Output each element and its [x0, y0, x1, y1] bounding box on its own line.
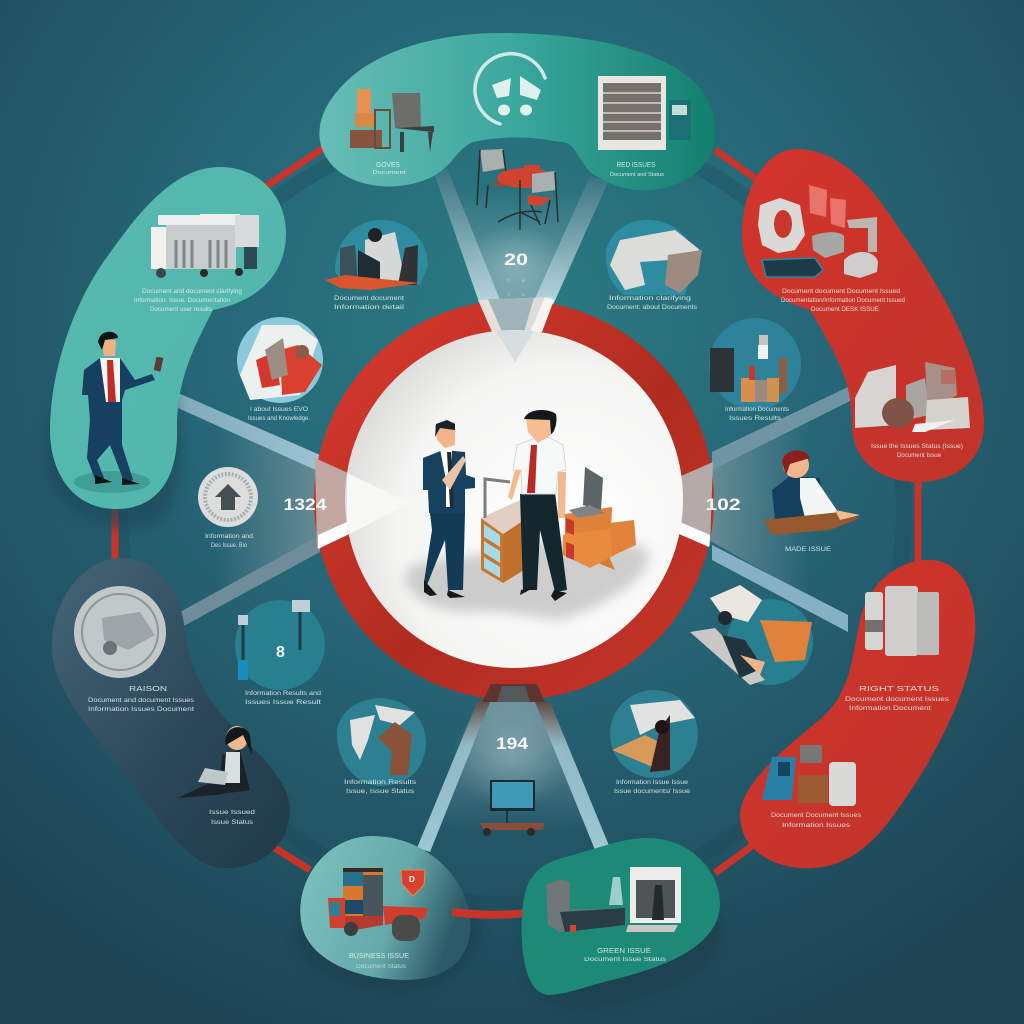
figure: man with phone: [74, 332, 163, 493]
text: Information Results and: [245, 690, 321, 697]
icon: appliances: [758, 185, 878, 278]
text: [349, 953, 409, 970]
central ring: [314, 297, 714, 702]
text: Documentation/Information Document Issued: [781, 297, 905, 304]
text: [248, 406, 310, 422]
text: [245, 690, 321, 706]
icon: printer equipment: [546, 867, 681, 932]
red connector: bottom: [452, 912, 526, 915]
text: Issues Results: [729, 415, 782, 422]
icon: cylinders: [865, 586, 939, 656]
text: Document document Issues: [845, 696, 950, 703]
text: I about Issues EVO: [250, 406, 308, 413]
text: Document Issue Status: [584, 957, 666, 963]
text: Document and document clarifying: [142, 288, 242, 295]
text: Document and document Issues: [88, 697, 195, 704]
text: Information Documents: [725, 406, 790, 413]
text: Document Document Issues: [771, 812, 862, 819]
text: Information Document: [849, 705, 931, 712]
label right: Document and Status: [610, 172, 664, 178]
text: Document Issue: [897, 452, 941, 459]
number: 20: o a: [507, 278, 526, 284]
text: Information Issue Issue: [616, 779, 688, 786]
text: [845, 684, 950, 712]
panel: lower right: [740, 560, 975, 868]
cabinet: [481, 479, 524, 583]
badge icon: [198, 467, 258, 527]
text: Issues and Knowledge.: [248, 415, 310, 422]
number: 194: 194: [496, 734, 529, 753]
text: [614, 779, 690, 795]
text: Issues Issue Result: [245, 699, 321, 706]
text: Information: Issue. Documentation: [134, 297, 230, 304]
text: [344, 779, 417, 795]
label left: Document: [372, 170, 406, 176]
panel: top: [319, 33, 715, 190]
text: Issue Issued: [209, 809, 255, 816]
icon: woman reading circle: [690, 585, 813, 685]
text: Document document Document Issued: [782, 288, 900, 295]
icon: globe lower left: [337, 698, 426, 786]
icon: globe lower right: [610, 690, 698, 778]
icon: truck: [328, 868, 428, 941]
icon: tools: [762, 745, 856, 806]
text: Document: about Documents: [607, 304, 698, 311]
icon: furniture: [350, 89, 434, 152]
text: Document document: [334, 295, 404, 302]
text: RAISON: [129, 686, 167, 693]
text: RIGHT STATUS: [859, 684, 939, 693]
man with red tie: [508, 410, 567, 601]
text: Information clarifying: [609, 295, 692, 302]
text: GREEN ISSUE: [597, 948, 651, 955]
label left: GOVES: [376, 160, 400, 169]
number: 194: [452, 700, 572, 810]
number: 1324: 1324: [284, 495, 327, 514]
label: MADE ISSUE: [785, 546, 832, 553]
figure: woman with laptop: [178, 726, 252, 798]
text: Issue documents/ Issue: [614, 788, 690, 795]
icon: sign circle: [235, 600, 325, 690]
icon: ring symbol: [475, 54, 545, 124]
text: [781, 288, 905, 313]
text: Issue Status: [211, 819, 254, 826]
label right: [610, 162, 664, 178]
panel: bottom right: [522, 838, 725, 1010]
icon: machine: [151, 214, 259, 278]
icon: globe top right: [606, 220, 702, 295]
text: Information Issues Document: [88, 706, 194, 713]
floor shadow: [405, 537, 649, 620]
text: [205, 533, 253, 549]
icon: product pile: [855, 362, 970, 432]
icon: panel screen: [598, 76, 691, 150]
panel: lower left: [52, 558, 290, 868]
text: Information Issues: [782, 822, 851, 829]
text: Issue, Issue Status: [346, 788, 415, 795]
icon: coin: [74, 586, 166, 678]
label left: [372, 160, 406, 176]
text: [871, 443, 963, 459]
beams from centre: [178, 168, 852, 852]
text: Issue the Issues Status (Issue): [871, 443, 963, 450]
text: Document user results: [150, 306, 213, 313]
text: [725, 406, 790, 422]
text: Document DESK ISSUE: [811, 306, 880, 313]
text: Document Status: [356, 964, 406, 970]
number: 20: [466, 225, 566, 305]
man in suit: [423, 420, 475, 598]
text: [209, 809, 255, 826]
icon: right circle: [709, 318, 801, 410]
panel: upper right: [742, 149, 984, 482]
number: 102: 102: [706, 495, 740, 514]
text: [584, 948, 666, 963]
text: [134, 288, 242, 313]
icon: sign circle: 8: [276, 644, 285, 661]
connecting ring: [115, 120, 918, 904]
text: [88, 686, 195, 713]
text: Information Results: [344, 779, 417, 786]
label right: RED ISSUES: [616, 162, 656, 169]
text: Des Issue. Bio: [211, 542, 247, 549]
text: Information and: [205, 533, 253, 540]
icon: truck: D: [409, 875, 415, 884]
number: 20: 20: [504, 250, 528, 269]
panel: bottom left: [295, 836, 480, 992]
number: 20: o a: [507, 292, 526, 298]
icon: table and chairs: [477, 149, 558, 230]
text: Information detail: [334, 304, 405, 311]
central white disc: [345, 330, 683, 668]
text: BUSINESS ISSUE: [349, 953, 409, 960]
panel: upper left: [45, 167, 286, 528]
icon: team circle: [325, 220, 428, 290]
text: [771, 812, 862, 829]
icon: monitor on cart: [480, 780, 545, 836]
icon: woman at desk: [764, 451, 860, 535]
icon: left circle: [237, 317, 323, 403]
boxes and laptop: [563, 467, 636, 570]
